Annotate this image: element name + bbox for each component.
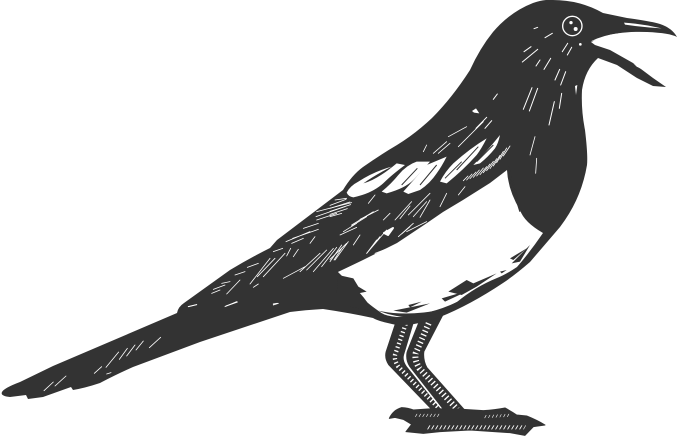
- rump highlight: [338, 261, 362, 274]
- gap between legs: [405, 320, 438, 405]
- small wing highlight: [384, 228, 393, 235]
- legs and feet: [385, 315, 545, 435]
- left leg scales: [395, 324, 438, 408]
- wing and back hatching: [330, 122, 537, 260]
- beak highlights: [624, 23, 662, 28]
- white belly: [338, 170, 543, 317]
- head and neck: [472, 16, 662, 128]
- left leg: [385, 318, 442, 410]
- foot scales: [428, 421, 525, 433]
- lower back hatching: [188, 195, 377, 307]
- eye: [563, 16, 582, 36]
- belly feather shading and rump tufts: [337, 245, 530, 317]
- neck feather flecks: [476, 27, 572, 128]
- foot: [389, 408, 545, 435]
- right leg: [406, 315, 467, 412]
- wing patch hatching: [402, 145, 493, 185]
- white wing patches: [347, 135, 500, 197]
- breast edge feathers: [509, 167, 520, 212]
- right leg scales: [415, 323, 457, 409]
- tail highlights: [44, 302, 277, 391]
